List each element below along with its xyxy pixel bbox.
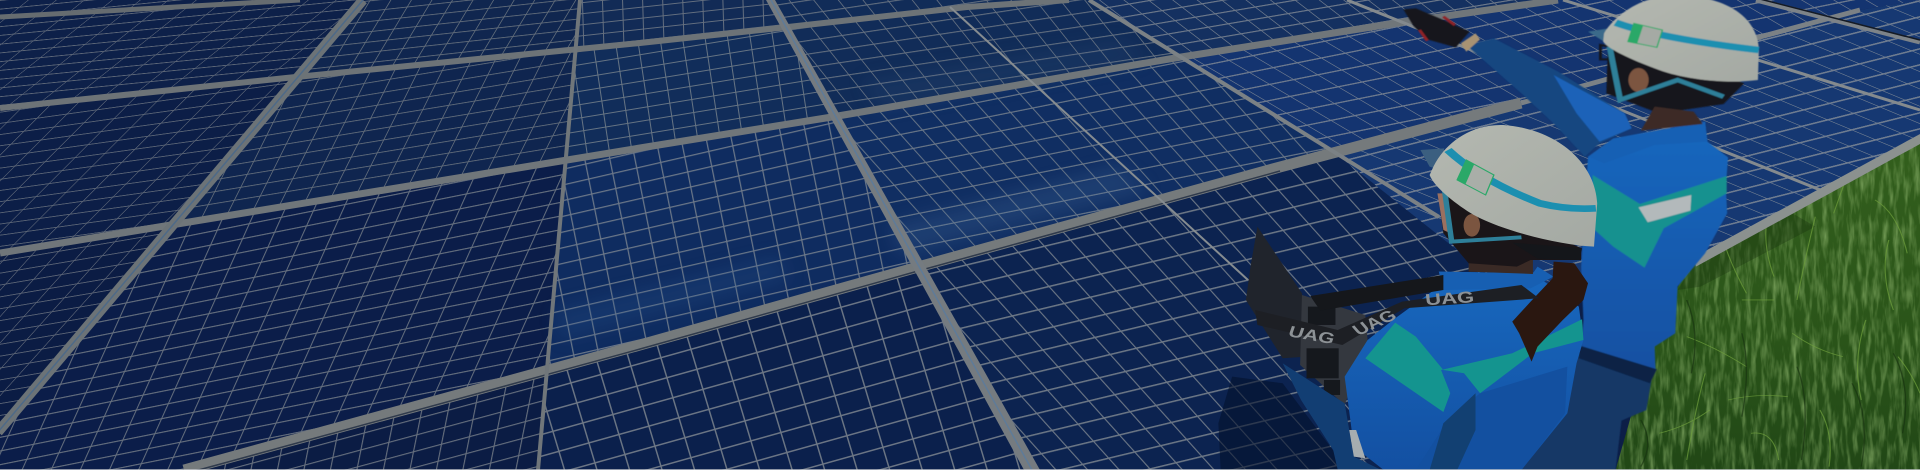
teal yoke and sleeve <box>1593 175 1727 268</box>
shadow on panels <box>1218 377 1342 470</box>
tablet held by female worker <box>1246 227 1368 405</box>
wrist <box>1461 33 1480 52</box>
glasses <box>1600 45 1611 59</box>
chin strap <box>1444 188 1521 242</box>
lower sleeve shading <box>1416 367 1567 470</box>
harness straps <box>1255 275 1539 347</box>
visor <box>1420 148 1444 170</box>
belt <box>1579 346 1657 383</box>
panel sheen highlights <box>555 40 1150 340</box>
teal yoke and band <box>1365 319 1583 412</box>
harness straps: UAG <box>1286 322 1337 347</box>
ponytail <box>1512 262 1588 362</box>
visor <box>1588 28 1609 42</box>
hair and head <box>1606 50 1744 113</box>
hair and face <box>1439 190 1581 267</box>
collar <box>1588 122 1707 163</box>
helmet tag <box>1457 160 1494 195</box>
helmet black liner <box>1512 243 1582 260</box>
helmet <box>1603 0 1759 82</box>
jacket torso <box>1581 122 1728 370</box>
trousers <box>1512 353 1655 470</box>
glove <box>1403 8 1470 47</box>
raised arm <box>1466 38 1632 157</box>
panel outer edge rail <box>1694 134 1920 267</box>
neck <box>1469 253 1533 274</box>
male worker <box>1403 0 1759 470</box>
harness straps: UAG <box>1348 306 1401 339</box>
jacket body <box>1345 272 1583 470</box>
reflective cuff <box>1349 430 1365 458</box>
collar <box>1439 267 1554 290</box>
grass field <box>1613 140 1920 470</box>
helmet tag <box>1628 23 1662 47</box>
female worker <box>1255 125 1597 470</box>
harness straps: UAG <box>1424 289 1475 309</box>
arm holding tablet <box>1283 363 1381 470</box>
figures drawn in the 1568x1410 working space of the right section <box>1218 0 1920 470</box>
reflective stripe <box>1639 195 1691 222</box>
chin strap <box>1610 47 1723 100</box>
bottom edge highlight <box>0 469 1920 470</box>
helmet <box>1430 125 1597 247</box>
